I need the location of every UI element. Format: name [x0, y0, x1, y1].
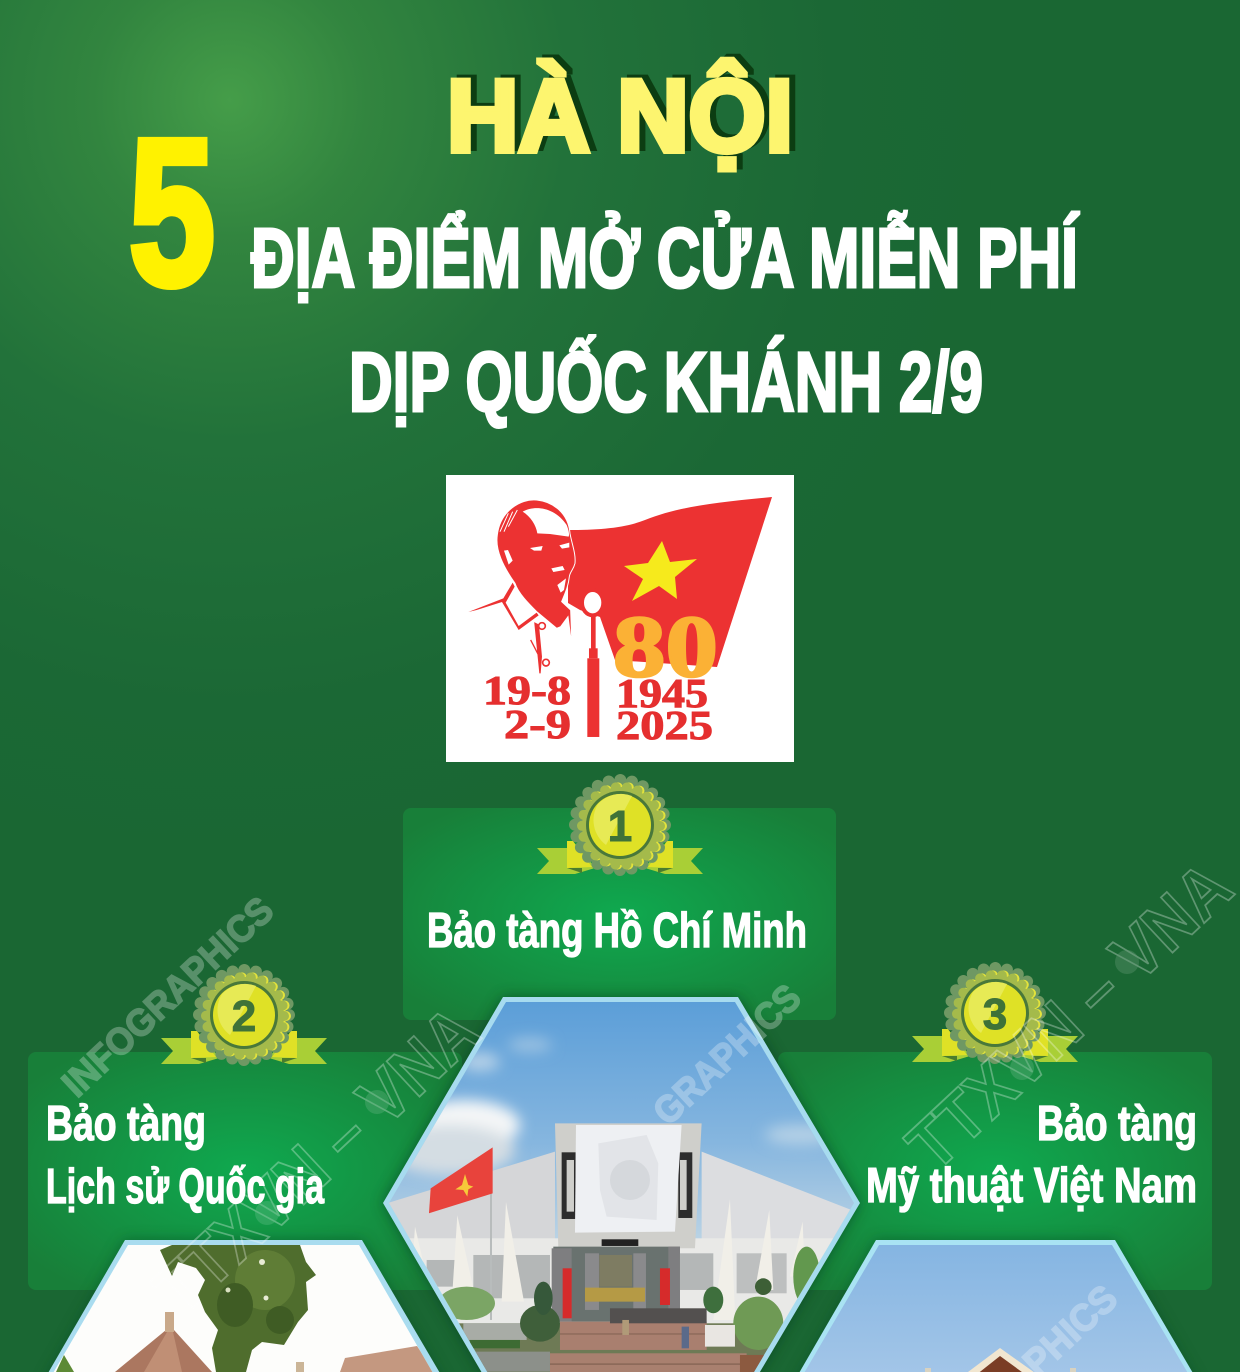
roofs: [56, 1312, 440, 1372]
roof: [925, 1348, 1076, 1372]
badge 3: [912, 968, 1078, 1062]
logo: 80th anniversary emblem: [446, 475, 794, 762]
panel 3 name: [866, 1097, 1197, 1213]
watermark: GRAPHICS centre: GRAPHICS: [645, 977, 809, 1134]
title: HÀ NỘI: HÀ NỘI: [447, 59, 793, 173]
emblem date 19-8: 19-8: [483, 667, 571, 713]
emblem microphone: [582, 590, 603, 737]
badge 1: [537, 780, 703, 874]
tree: [160, 1245, 316, 1372]
photo hexagon 2: museum of national history: [40, 1240, 450, 1372]
panel 1 name: Bảo tàng Hồ Chí Minh: [427, 904, 807, 958]
watermark: TTXVN – VNA left: TTXVN – VNA: [139, 991, 494, 1329]
badge 1: 1: [608, 802, 632, 851]
watermark: INFOGRAPHICS left: INFOGRAPHICS: [54, 889, 282, 1106]
emblem number 80: 80: [613, 599, 718, 696]
emblem portrait: [468, 500, 575, 673]
photo hexagon 3: fine arts museum: [790, 1240, 1200, 1372]
panel 2 name: Bảo tàng: [46, 1097, 206, 1151]
badge 2: 2: [232, 992, 256, 1041]
emblem flag: [568, 497, 772, 667]
emblem star: [624, 541, 697, 601]
clouds: [385, 1038, 835, 1175]
panel 1: Bảo tàng Hồ Chí Minh: [403, 808, 836, 1020]
emblem date 2-9: 2-9: [504, 701, 571, 747]
big number 5: 5: [129, 97, 215, 329]
badge 2: [161, 970, 327, 1064]
panel 2 name: [46, 1097, 325, 1214]
emblem year 2025: 2025: [616, 702, 713, 748]
photo hexagon 1: Ho Chi Minh Museum: [380, 997, 860, 1372]
title line: dịp quốc khánh 2/9: DỊP QUỐC KHÁNH 2/9: [349, 335, 983, 429]
badge 3: 3: [983, 990, 1007, 1039]
emblem year 1945: 1945: [616, 670, 708, 716]
panel 2 name: Lịch sử Quốc gia: [46, 1160, 325, 1214]
title: HÀ NỘI: HÀ NỘI: [453, 56, 799, 170]
panel 3: Bảo tàng Mỹ thuật Việt Nam: [778, 1052, 1212, 1290]
panel 2: Bảo tàng Lịch sử Quốc gia: [28, 1052, 462, 1290]
museum building: [387, 1123, 860, 1372]
